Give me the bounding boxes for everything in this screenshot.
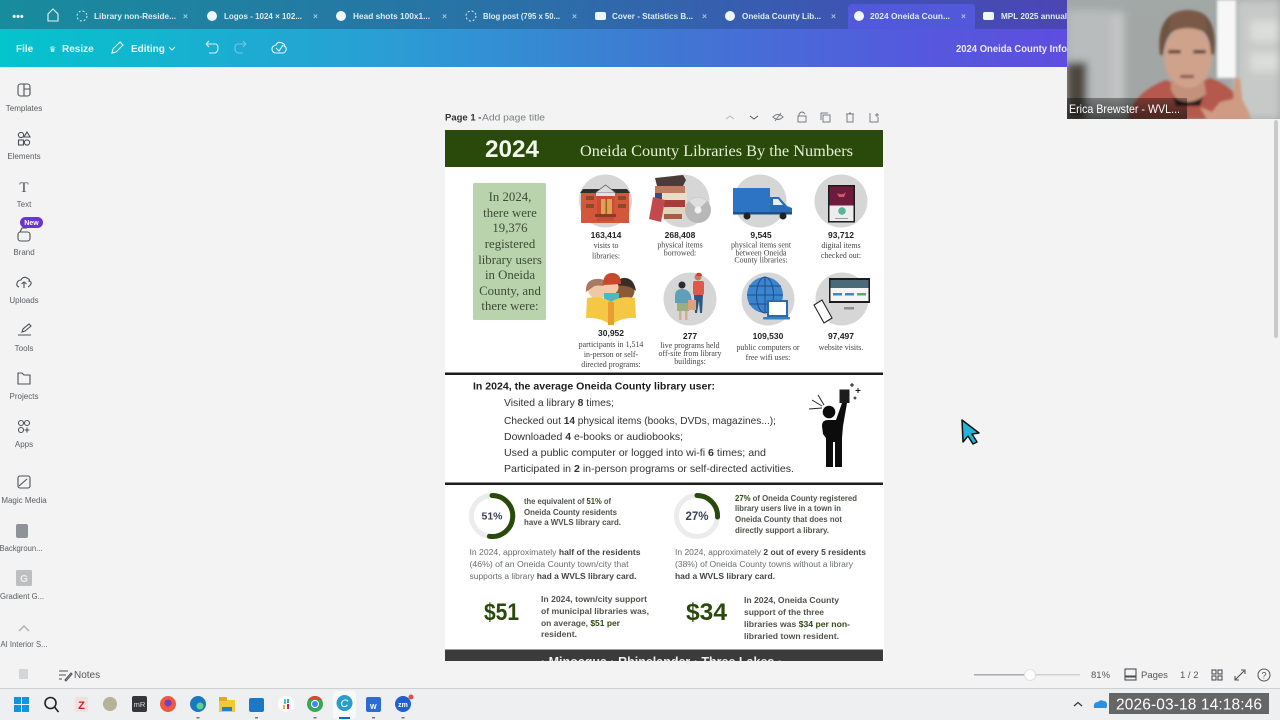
hoodie [1128, 78, 1236, 119]
text: $34 description: libraries was $34 per non- [744, 620, 850, 629]
icon: two people [675, 273, 704, 320]
text: $51 description [541, 595, 649, 639]
left sidebar: Apps [15, 440, 33, 449]
stat: computers and wifi: public computers or [736, 343, 800, 352]
zoom and page controls: Pages [1141, 670, 1168, 681]
browser tab strip: × [183, 11, 188, 21]
left sidebar: Text [17, 200, 32, 209]
icon: projects [18, 373, 30, 384]
webcam panel: speaker [1067, 0, 1280, 123]
paragraph: 2 out of 5 residents: In 2024, approximately 2 out of every 5 residents [675, 547, 866, 557]
stat: off-site programs: off-site from library [659, 349, 722, 358]
stat: visits: libraries: [592, 252, 620, 260]
icon: mouse cursor [962, 420, 979, 444]
left sidebar: AI Interior S... [0, 640, 48, 649]
timestamp overlay: 2026-03-18 14:18:46 [1116, 696, 1262, 714]
icon: magic media [18, 476, 30, 488]
left sidebar: Elements [7, 152, 41, 161]
page title bar: Page 1 - [445, 112, 481, 124]
icon: tray chevron [1074, 702, 1082, 706]
left sidebar: Gradient G... [0, 592, 44, 601]
browser tab strip: Head shots 100x1... [353, 11, 430, 21]
text block: average user: Participated in 2 in-person programs or self-directed activities. [504, 464, 794, 475]
icon: ai interior [19, 626, 29, 631]
neck [1170, 80, 1207, 104]
text: $51 description: resident. [541, 630, 577, 639]
browser tab strip: × [831, 11, 836, 21]
icon: zoom [395, 694, 414, 712]
icon: books and disc [649, 175, 711, 223]
icon: help: ? [1261, 670, 1267, 680]
icon: slack [278, 696, 294, 712]
icon: mR: mR [134, 700, 146, 709]
icon: undo [206, 41, 218, 53]
icon: onedrive [1094, 700, 1107, 708]
stat: off-site programs [659, 272, 722, 366]
icon: home [48, 9, 58, 21]
paragraph: half of residents: In 2024, approximately half of the residents [470, 547, 641, 557]
windows taskbar [0, 688, 1280, 720]
icon: children reading [586, 273, 636, 325]
text: 51% description: Oneida County residents [524, 508, 617, 517]
text: 27% description: library users live in a town in [735, 504, 841, 513]
stat: digital items: digital items [821, 241, 861, 250]
text: 27% description [735, 494, 857, 535]
header banner [445, 130, 883, 167]
text: 27% description: 27% of Oneida County registered [735, 494, 857, 503]
face [1164, 26, 1212, 88]
icon: canva active: C [341, 698, 349, 710]
icon: globe and laptop [747, 277, 790, 320]
stat: computers and wifi [736, 272, 800, 362]
paragraph: half of residents: (46%) of an Oneida County town/city that [470, 559, 629, 569]
icon: delivery truck [733, 188, 792, 220]
divider [445, 482, 883, 485]
text: $34 description [744, 596, 850, 641]
icon: word: W [370, 704, 377, 711]
zoom and page controls: 1 / 2 [1180, 670, 1198, 681]
icon: app c [103, 697, 117, 711]
browser tab strip: × [702, 11, 707, 21]
icon: edge [190, 696, 206, 712]
text: 27% description: Oneida County that does not [735, 515, 842, 524]
icon: redo [235, 41, 246, 53]
icon: qr app [19, 669, 28, 679]
icon: zotero [75, 697, 88, 712]
stat: website visits: website visits. [819, 343, 863, 352]
page title bar [445, 112, 879, 124]
paragraph: 2 out of 5 residents: had a WVLS library card. [675, 571, 775, 581]
icon: tools [18, 324, 31, 335]
icon: zoom: zm [398, 702, 408, 709]
stat: digital items [814, 174, 868, 260]
stat: computers and wifi: free wifi uses: [746, 353, 790, 362]
menu dots: ••• [12, 11, 24, 23]
text: $51 description: of municipal libraries was, [541, 607, 649, 616]
footer band: library towns [445, 650, 883, 661]
icon: elements [18, 132, 30, 145]
icon: file explorer [219, 697, 235, 712]
text: 51% description: have a WVLS library card. [524, 518, 621, 527]
header banner: 2024 [485, 136, 540, 163]
stat: borrowed: borrowed: [664, 248, 696, 258]
browser tab strip: × [572, 11, 577, 21]
stat: participants: in-person or self- [584, 350, 639, 359]
stat: borrowed: physical items [657, 240, 703, 250]
editor toolbar: 2024 Oneida County Info [956, 44, 1067, 55]
left sidebar: T [19, 180, 29, 196]
stat: borrowed: 268,408 [665, 230, 696, 240]
editor toolbar: Editing [131, 44, 165, 55]
donut chart: 51%: 51% [481, 510, 503, 522]
donut chart: 51% [472, 495, 513, 536]
webcam panel: speaker: Erica Brewster - WVL... [1069, 102, 1180, 116]
page title bar: Add page title [482, 112, 545, 124]
left sidebar: Brand [13, 248, 35, 257]
icon: library building [580, 185, 630, 223]
icon: windows start [14, 697, 29, 712]
icon: firefox [160, 696, 176, 712]
stat: participants: 30,952 [598, 328, 624, 338]
stat: participants: participants in 1,514 [579, 340, 643, 349]
header banner: Oneida County Libraries By the Numbers [580, 143, 853, 160]
stat: off-site programs: buildings: [674, 357, 706, 366]
hand [1200, 78, 1251, 123]
callout: registered users: library users [478, 253, 542, 267]
stat: transfers: between Oneida [735, 248, 787, 258]
page scrollbar [1274, 120, 1278, 338]
stat: transfers: 9,545 [750, 230, 772, 240]
icon: grid view [1212, 670, 1222, 680]
paragraph: half of residents: supports a library had a WVLS library card. [470, 571, 636, 581]
hair [1159, 10, 1215, 55]
browser tab strip: Oneida County Lib... [742, 11, 821, 21]
text: 51% description: the equivalent of 51% of [524, 497, 611, 506]
icon: apps [18, 420, 30, 432]
icon: pages [1125, 669, 1136, 680]
browser tab strip [0, 0, 1280, 29]
new badge [20, 217, 43, 228]
browser tab strip: × [961, 11, 966, 21]
text block: average user: Checked out 14 physical items (books, DVDs, magazines...); [504, 416, 776, 427]
paragraph: 2 out of 5 residents: (38%) of Oneida County towns without a library [675, 559, 854, 569]
stat: transfers: physical items sent [731, 240, 792, 250]
callout: registered users: in Oneida [485, 268, 535, 282]
paragraph: 2 out of 5 residents [675, 547, 866, 581]
text: $51 description: In 2024, town/city support [541, 595, 647, 604]
left sidebar: Magic Media [1, 496, 47, 505]
stat: digital items: 93,712 [828, 230, 854, 240]
left sidebar: Uploads [9, 296, 39, 305]
callout: registered users: there were [483, 206, 537, 220]
browser tab strip: × [313, 11, 318, 21]
browser tab strip: 2024 Oneida Coun... [870, 11, 950, 21]
icon: gradient generator [16, 570, 32, 586]
left sidebar: Tools [15, 344, 33, 353]
icon: chrome [307, 696, 323, 712]
stat: transfers: County libraries: [734, 256, 788, 264]
stat: $51: $51 [484, 599, 519, 626]
divider [445, 372, 883, 375]
text: 51% description [524, 497, 621, 527]
icon: brand [18, 228, 30, 241]
paragraph: half of residents [470, 547, 641, 581]
editor toolbar: File [16, 44, 34, 55]
stat: transfers [731, 174, 792, 264]
donut chart: 27%: 27% [685, 511, 709, 523]
icon: word [366, 697, 381, 712]
stat: $34: $34 [686, 599, 728, 626]
stat: website visits [814, 272, 870, 352]
stat: visits [579, 174, 632, 260]
stat: off-site programs: 277 [683, 331, 697, 341]
stat: visits: visits to [594, 241, 618, 250]
icon: uploads [17, 277, 31, 288]
stat: borrowed [649, 174, 711, 258]
icon: tablet [828, 185, 855, 222]
editor toolbar: ♛ [49, 45, 56, 54]
notes button: Notes [74, 670, 100, 681]
text: $34 description: libraried town resident. [744, 632, 839, 641]
left sidebar: Templates [6, 104, 42, 113]
callout: registered users: County, and [479, 284, 541, 298]
callout: registered users: 19,376 [492, 221, 528, 235]
icon: fullscreen [1235, 670, 1245, 680]
footer band: library towns: · Minocqua · Rhinelander · Three Lakes · [541, 654, 782, 669]
icon: pencil [112, 42, 123, 53]
stat: computers and wifi: 109,530 [753, 331, 784, 341]
text block: average user: Downloaded 4 e-books or audiobooks; [504, 432, 683, 443]
text: $51 description: on average, $51 per [541, 619, 621, 628]
browser tab strip: Blog post (795 x 50... [483, 11, 560, 21]
active tab [848, 4, 975, 29]
stat: off-site programs: live programs held [660, 341, 720, 350]
eyes and mouth [1168, 50, 1181, 54]
running app indicators [196, 717, 404, 718]
text: $34 description: support of the three [744, 608, 824, 617]
stat: participants [579, 273, 643, 369]
icon: person holding book [809, 383, 860, 467]
text: $34 description: In 2024, Oneida County [744, 596, 839, 605]
icon: gradient generator: G [20, 574, 28, 585]
left sidebar [0, 84, 48, 679]
callout: registered users: there were: [481, 299, 539, 313]
icon: search [45, 698, 58, 712]
text: 27% description: directly support a library. [735, 526, 829, 535]
page action icons [726, 112, 879, 122]
callout: registered users: In 2024, [489, 190, 531, 204]
icon: mR [132, 696, 147, 712]
zoom and page controls: 81% [1091, 670, 1111, 681]
icon: canva active [333, 691, 356, 719]
browser tab strip: Library non-Reside... [94, 11, 176, 21]
stat: participants: directed programs: [581, 360, 641, 369]
text block: average user: Used a public computer or logged into wi-fi 6 times; and [504, 448, 766, 459]
left sidebar: Projects [10, 392, 38, 401]
editor toolbar: Resize [62, 44, 94, 55]
browser tab strip: × [442, 11, 447, 21]
browser tab strip: Logos - 1024 × 102... [224, 11, 302, 21]
stat: digital items: checked out: [821, 251, 861, 260]
text block: average user [473, 382, 794, 475]
text block: average user: Visited a library 8 times; [504, 398, 614, 409]
icon: templates [18, 84, 30, 96]
infographic page [445, 130, 884, 669]
icon: monitor and phone [814, 278, 870, 323]
callout: registered users [473, 183, 546, 320]
icon: zotero: Z [78, 700, 85, 712]
text block: average user: In 2024, the average Oneida County library user: [473, 382, 715, 392]
callout: registered users: registered [485, 237, 536, 251]
icon: saved cloud [272, 42, 286, 53]
stat: website visits: 97,497 [828, 331, 854, 341]
icon: outlook [249, 698, 264, 712]
icon: background app [16, 524, 28, 538]
notes button [59, 670, 100, 681]
left sidebar: Backgroun... [0, 544, 42, 553]
zoom and page controls [974, 669, 1270, 681]
browser tab strip: MPL 2025 annual [1001, 11, 1067, 21]
new badge: New [24, 220, 39, 227]
editor toolbar [0, 29, 1280, 67]
donut chart: 27% [676, 496, 718, 536]
browser tab strip: Cover - Statistics B... [612, 11, 693, 21]
icon: help [1258, 669, 1270, 681]
stat: visits: 163,414 [591, 230, 622, 240]
